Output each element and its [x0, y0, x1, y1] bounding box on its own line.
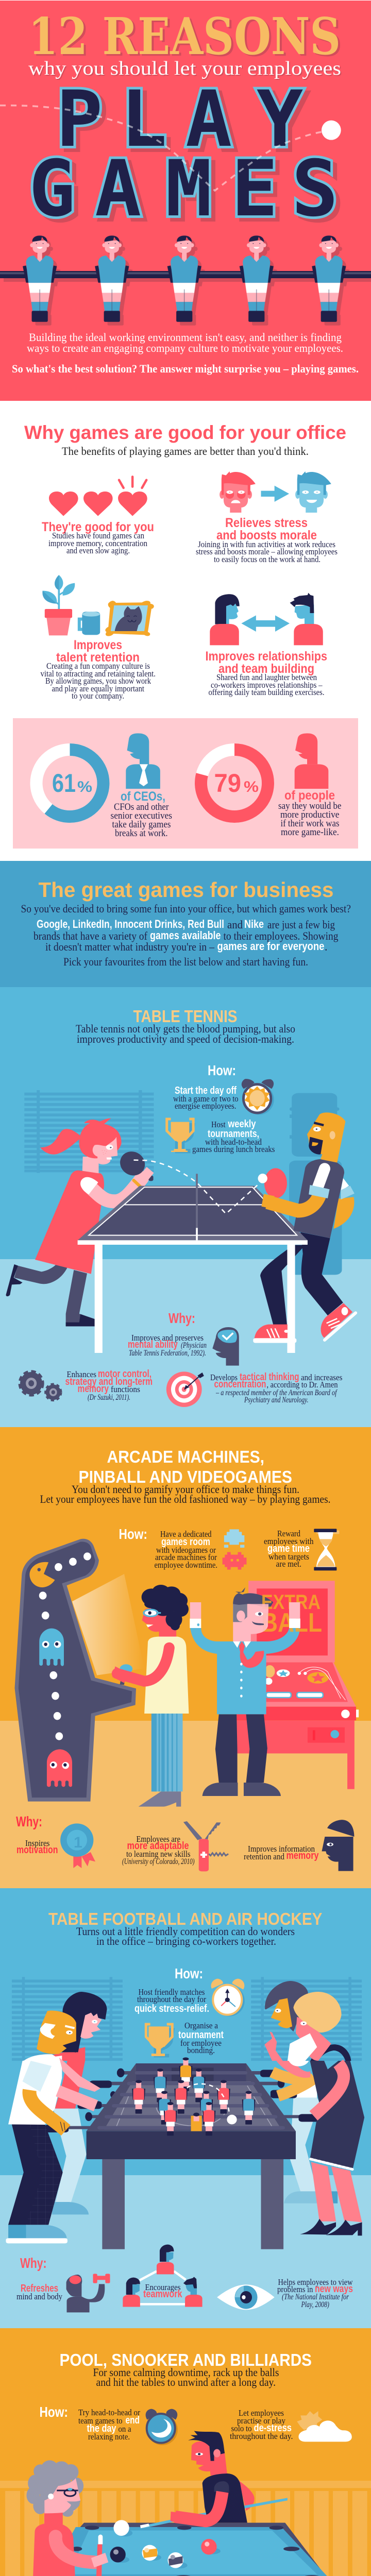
benefit: improves talent retention: vital to attracting and retaining talent. — [40, 669, 156, 679]
women right — [272, 2061, 364, 2235]
ping pong table — [78, 1174, 308, 1353]
window blinds — [24, 1090, 154, 1173]
icon: eye — [217, 2284, 275, 2310]
text: table tennis how — [173, 1062, 275, 1154]
icon: rosette: 1 — [74, 1834, 82, 1851]
icon: three hearts — [49, 477, 147, 516]
text: foosball how — [134, 1965, 224, 2055]
text: of people: more game-like. — [281, 827, 339, 838]
illustration: foosball scene upper — [12, 1977, 362, 2061]
reason: new ways: problems in — [277, 2284, 313, 2294]
reason: motor control: (Dr Suzuki, 2011). — [88, 1393, 130, 1402]
benefit: relieves stress: to easily focus on the work at hand. — [214, 554, 321, 564]
benefit: improves relationships: Shared fun and laughter between — [216, 672, 317, 682]
icon: dashed ball trail and ball — [0, 106, 341, 191]
chart: 79% donut: % — [244, 778, 259, 795]
text: pool how: solo to — [231, 2424, 251, 2433]
text: arcade how — [119, 1526, 314, 1570]
text: table football intro — [76, 1925, 295, 1947]
benefit: they're good for you — [42, 520, 154, 555]
benefit: improves relationships: and team building — [218, 662, 314, 676]
reason: tactical thinking: tactical thinking — [240, 1371, 299, 1383]
text: of people: if their work was — [280, 818, 339, 829]
benefit: relieves stress: and boosts morale — [216, 528, 317, 543]
text: arcade how: with videogames or — [156, 1545, 216, 1555]
benefit: relieves stress: stress and boosts morale – allowing employees — [196, 547, 338, 556]
text: pool how: de-stress — [254, 2422, 292, 2434]
reason: new ways: new ways — [315, 2283, 353, 2295]
reason: tactical thinking: – a respected member of the American Board of — [215, 1388, 338, 1397]
text: pool intro: and hit the tables to unwind after a long day. — [96, 2376, 276, 2388]
repaint of man's face over backglass — [247, 1602, 300, 1634]
reason: motor control: functions — [111, 1384, 140, 1394]
heading: pool: POOL, SNOOKER AND BILLIARDS — [60, 2350, 312, 2369]
icons: moon clock and sun cloud — [146, 2409, 352, 2445]
wall pads — [289, 1093, 342, 1275]
text: arcade how: How: — [119, 1526, 147, 1542]
blinds left and right — [12, 1977, 362, 2061]
text: foosball how: tournament — [178, 2029, 224, 2041]
panel: table tennis background — [0, 987, 371, 1427]
text block: business intro: and — [227, 918, 243, 931]
rods over table — [97, 2071, 285, 2129]
benefit: they're good for you: They're good for you — [42, 520, 154, 534]
text: of people: of people — [284, 788, 335, 803]
icon: head with tick — [212, 1327, 239, 1366]
benefit: improves talent retention: and play are equally important — [52, 684, 144, 693]
pool balls — [110, 2520, 221, 2568]
icon: two people talking with double arrow — [210, 593, 323, 645]
reason: adaptable: (University of Colorado, 2010) — [122, 1857, 195, 1866]
foosball row of players — [0, 235, 371, 322]
right players heads — [264, 1981, 351, 2061]
text block: intro: Building the ideal working environment isn't easy, and neither is finding — [29, 331, 342, 344]
text: arcade how: employees with — [264, 1536, 314, 1546]
text: arcade how: arcade machines for — [155, 1552, 217, 1562]
reason: motivation: motivation — [16, 1844, 58, 1856]
heading: arcade machines: PINBALL AND VIDEOGAMES — [78, 1467, 292, 1486]
text: table tennis how: games during lunch breaks — [192, 1144, 275, 1154]
text: arcade how: are met. — [276, 1559, 301, 1569]
reason: new ways — [277, 2277, 353, 2309]
text: table tennis intro: Table tennis not only gets the blood pumping, but also — [76, 1022, 295, 1035]
benefit: relieves stress: Joining in with fun activities at work reduces — [198, 539, 335, 549]
text block: business intro: Nike — [244, 918, 264, 930]
text: pool how: on a — [119, 2424, 131, 2434]
heading: table tennis: TABLE TENNIS — [133, 1007, 237, 1026]
reason: memory: memory — [286, 1850, 319, 1861]
text: table tennis how: tournaments, — [208, 1128, 259, 1140]
benefit: they're good for you: Studies have found games can — [52, 531, 144, 540]
reason: tactical thinking: and increases — [301, 1372, 342, 1382]
reason: motivation — [16, 1838, 58, 1856]
panel: pink statistics — [13, 718, 358, 849]
text block: intro — [12, 331, 359, 375]
man left — [6, 2056, 100, 2243]
text: pool how: the day — [87, 2423, 116, 2434]
reason: mental ability: (Physician — [181, 1341, 207, 1350]
chart: 61% donut: % — [77, 778, 92, 795]
benefit: they're good for you: improve memory, concentration — [48, 538, 147, 548]
woman player — [6, 1118, 154, 1326]
subtitle: why you should let your employees: why you should let your employees — [28, 58, 341, 79]
text: arcade intro: You don't need to gamify your office to make things fun. — [72, 1483, 299, 1496]
text block: business intro: brands that have a variety of — [33, 929, 148, 942]
illustration: table tennis game — [6, 1079, 355, 1353]
text: EXTRA BALL on pinball backglass: BALL — [261, 1608, 322, 1638]
text: foosball how: Host friendly matches — [138, 1987, 205, 1997]
text: arcade intro — [40, 1483, 331, 1505]
text: pool how: relaxing note. — [88, 2432, 130, 2442]
chart: 79% donut — [201, 750, 268, 817]
man at arcade — [190, 1587, 300, 1796]
text: of CEOs: CFOs and other — [114, 802, 169, 812]
older woman — [26, 2460, 108, 2576]
wall panelling — [0, 2481, 371, 2576]
man's shoes — [253, 1303, 356, 1343]
reason: memory — [244, 1844, 319, 1861]
man trousers — [260, 1232, 343, 1325]
text: foosball how: for employee — [180, 2038, 222, 2048]
icon: orange clock and trophy — [146, 1979, 245, 2057]
text: of CEOs: of CEOs, — [121, 789, 165, 804]
text: foosball how: quick stress-relief. — [134, 2003, 209, 2014]
icon: teamwork triangle — [123, 2245, 203, 2307]
benefit: improves relationships: offering daily team building exercises. — [208, 687, 325, 697]
text block: business intro: Google, LinkedIn, Innocent Drinks, Red Bull — [37, 918, 224, 930]
reason: adaptable — [122, 1834, 195, 1866]
reason: motor control: motor control, — [98, 1368, 151, 1380]
panel: pool background — [0, 2328, 371, 2576]
pinball machine — [233, 1581, 359, 1789]
text: table tennis how: Start the day off — [175, 1085, 237, 1096]
miniature players — [132, 2057, 255, 2136]
rods and handles behind — [44, 2069, 323, 2132]
icon: executive with tie — [126, 733, 160, 789]
panel: hero red background — [0, 1, 371, 401]
reason: motor control — [65, 1368, 153, 1402]
heading: arcade machines: ARCADE MACHINES, — [107, 1447, 264, 1466]
player man — [188, 2431, 288, 2523]
text: of CEOs: take daily games — [112, 819, 171, 830]
reason: motor control: memory — [77, 1383, 109, 1395]
reason: mental ability: Table Tennis Federation, 1992). — [129, 1349, 206, 1358]
cue and man's arm — [140, 2492, 223, 2528]
reason: new ways: (The National Institute for — [282, 2293, 349, 2301]
text: of people: more productive — [280, 809, 339, 820]
reason: adaptable: more adaptable — [127, 1840, 189, 1852]
table — [87, 2063, 296, 2249]
heading: arcade machines — [78, 1447, 292, 1486]
text: of people: say they would be — [278, 801, 341, 811]
text block: business intro: Pick your favourites from the list below and start having fun. — [63, 955, 308, 968]
text: pool intro: For some calming downtime, rack up the balls — [93, 2366, 279, 2379]
panel: arcade background — [0, 1427, 371, 1888]
text: table football intro: in the office – bringing co-workers together. — [96, 1935, 276, 1947]
benefit: improves talent retention — [40, 638, 156, 701]
heading: why (arcade): Why: — [16, 1814, 42, 1829]
text: pool how: How: — [39, 2404, 68, 2420]
text: table tennis how: with a game or two to — [173, 1094, 238, 1104]
heading: why (table tennis): Why: — [168, 1310, 195, 1326]
icon: plant, mug and cat picture — [42, 575, 154, 636]
icon: head with open top — [322, 1820, 354, 1871]
icon: hourglass — [314, 1529, 339, 1570]
reason: teamwork: Encourages — [145, 2282, 180, 2292]
icon: swiss army knife — [183, 1821, 228, 1871]
text: arcade intro: Let your employees have fun the old fashioned way – by playing games. — [40, 1493, 331, 1505]
benefit: improves talent retention: talent retention — [56, 650, 140, 665]
heading: The great games for business — [38, 878, 334, 902]
text: pool how — [39, 2404, 293, 2442]
heading: table football: TABLE FOOTBALL AND AIR HOCKEY — [48, 1909, 323, 1928]
text: table tennis how: with head-to-head — [205, 1137, 262, 1147]
text block: intro: ways to create an engaging company culture to motivate your employees. — [27, 342, 343, 354]
reason: new ways: Play, 2008) — [301, 2300, 329, 2309]
text block: business intro: . — [325, 940, 328, 953]
text: of CEOs: breaks at work. — [115, 828, 168, 839]
text: arcade how: Reward — [277, 1529, 301, 1538]
chart: 79% donut: 79 — [214, 769, 241, 798]
icon: head and dumbbell — [66, 2274, 110, 2312]
text block: business intro: games are for everyone — [217, 940, 325, 953]
reason: adaptable: to learning new skills — [126, 1849, 191, 1859]
reason: teamwork — [143, 2282, 182, 2300]
text: of CEOs — [110, 789, 172, 839]
reason: motor control: strategy and long-term — [65, 1376, 153, 1387]
text: EXTRA BALL on pinball backglass — [261, 1591, 322, 1638]
text: pool how: Let employees — [239, 2408, 284, 2418]
left players heads — [24, 1992, 107, 2061]
text: arcade how: Have a dedicated — [160, 1529, 212, 1539]
text: of people — [278, 788, 341, 838]
pool table — [69, 2523, 331, 2576]
text: foosball how: How: — [175, 1965, 203, 1981]
benefit: improves talent retention: to your company. — [72, 691, 124, 701]
title: GAMES: GAMES — [29, 144, 338, 234]
reason: motivation: Inspires — [25, 1838, 49, 1848]
reason: memory: retention and — [244, 1852, 285, 1861]
benefit: improves relationships — [205, 649, 327, 697]
text block: business intro: to their employees. Showing — [224, 929, 338, 942]
man upper body — [258, 1112, 345, 1238]
illustration: arcade scene — [14, 1539, 359, 1807]
text: EXTRA BALL on pinball backglass: EXTRA — [261, 1591, 321, 1614]
text: arcade how: games room — [161, 1536, 210, 1548]
screen glow — [72, 1574, 144, 1675]
text: pool how: Try head-to-head or — [78, 2408, 140, 2417]
reason: tactical thinking: , according to Dr. Amen — [267, 1380, 338, 1389]
text: foosball how: bonding. — [187, 2045, 215, 2055]
text: pool how: practise or play — [237, 2416, 286, 2426]
icon: person silhouette — [295, 733, 328, 789]
text block: business intro — [21, 902, 351, 968]
title: PLAY: PLAY — [56, 75, 303, 164]
benefit: improves relationships: co-workers improves relationships – — [211, 680, 323, 690]
reason: tactical thinking: concentration — [214, 1379, 266, 1390]
benefit: improves talent retention: By allowing games, you show work — [45, 676, 151, 686]
benefit: relieves stress: Relieves stress — [225, 516, 308, 530]
icon: trophy — [167, 1119, 195, 1153]
icon: target with arrow — [166, 1371, 204, 1407]
reason: tactical thinking: Develops — [210, 1372, 238, 1382]
text: pool how: end — [126, 2415, 140, 2426]
benefit: improves relationships: Improves relationships — [205, 649, 327, 664]
text: benefits subheading: The benefits of playing games are better than you'd think. — [62, 445, 309, 457]
background players legs — [52, 2060, 338, 2214]
panel: table football background — [0, 1888, 371, 2328]
icon: gears — [20, 1371, 61, 1400]
panel: the great games for business — [0, 861, 371, 987]
text: table tennis how: weekly — [228, 1118, 256, 1130]
text: of CEOs: senior executives — [110, 810, 172, 821]
text: foosball how: Organise a — [184, 2021, 218, 2030]
heading: why (foosball): Why: — [20, 2255, 46, 2271]
woman at arcade — [112, 1585, 189, 1807]
text: table tennis intro — [76, 1022, 295, 1045]
text block: intro: So what's the best solution? The answer might surprise you – playing games. — [12, 362, 359, 375]
reason: mental ability — [128, 1333, 207, 1358]
reason: memory: Improves information — [248, 1844, 315, 1854]
reason: new ways: Helps employees to view — [278, 2277, 353, 2287]
reason: adaptable: Employees are — [136, 1834, 180, 1844]
text: table tennis how: energise employees. — [175, 1101, 236, 1111]
benefit: relieves stress — [196, 516, 338, 564]
text: arcade how: game time — [267, 1543, 310, 1554]
icon: space invaders — [223, 1529, 246, 1570]
text: arcade how: employee downtime. — [155, 1560, 217, 1570]
reason: refreshes — [16, 2283, 63, 2301]
text: pool how: team games to — [78, 2416, 123, 2426]
benefit: improves talent retention: Improves — [74, 638, 122, 652]
text: foosball how: throughout the day for — [137, 1994, 206, 2004]
text: pool intro — [93, 2366, 279, 2388]
text block: business intro: it doesn't matter what industry you're in – — [45, 940, 215, 953]
benefit: they're good for you: and even slow aging. — [66, 546, 130, 555]
text block: business intro: games available — [150, 929, 221, 942]
text: pool how: throughout the day. — [230, 2431, 293, 2441]
reason: motor control: Enhances — [67, 1369, 96, 1379]
illustration: pool scene — [0, 2431, 371, 2576]
man player back — [333, 1178, 355, 1229]
ball trail — [133, 1160, 260, 1214]
benefit: improves talent retention: Creating a fun company culture is — [46, 661, 150, 671]
icon: rosette — [60, 1823, 95, 1868]
icon: alarm clock — [242, 1079, 274, 1115]
reason: refreshes: Refreshes — [21, 2283, 58, 2294]
text: table tennis how: Host — [211, 1120, 226, 1129]
reason: tactical thinking: Psychiatry and Neurology. — [244, 1396, 308, 1404]
reason: tactical thinking — [210, 1371, 342, 1404]
reason: refreshes: mind and body — [16, 2292, 63, 2301]
illustration: foosball table and players — [6, 2056, 364, 2249]
text: table tennis how: How: — [208, 1062, 236, 1078]
arcade cabinet — [14, 1539, 136, 1802]
reason: mental ability: mental ability — [128, 1339, 178, 1350]
reason: mental ability: Improves and preserves — [131, 1333, 204, 1343]
chart: 61% donut: 61 — [52, 769, 76, 798]
reason: teamwork: teamwork — [143, 2289, 182, 2300]
text: arcade how: when targets — [268, 1552, 309, 1562]
chart: 61% donut — [36, 750, 103, 817]
text: table football intro: Turns out a little friendly competition can do wonders — [76, 1925, 295, 1938]
heading: why games are good: Why games are good for your office — [24, 422, 346, 443]
text block: business intro: are just a few big — [267, 918, 335, 931]
icon: stressed to happy faces — [220, 471, 331, 513]
text: table tennis intro: improves productivity and speed of decision-making. — [77, 1032, 294, 1045]
